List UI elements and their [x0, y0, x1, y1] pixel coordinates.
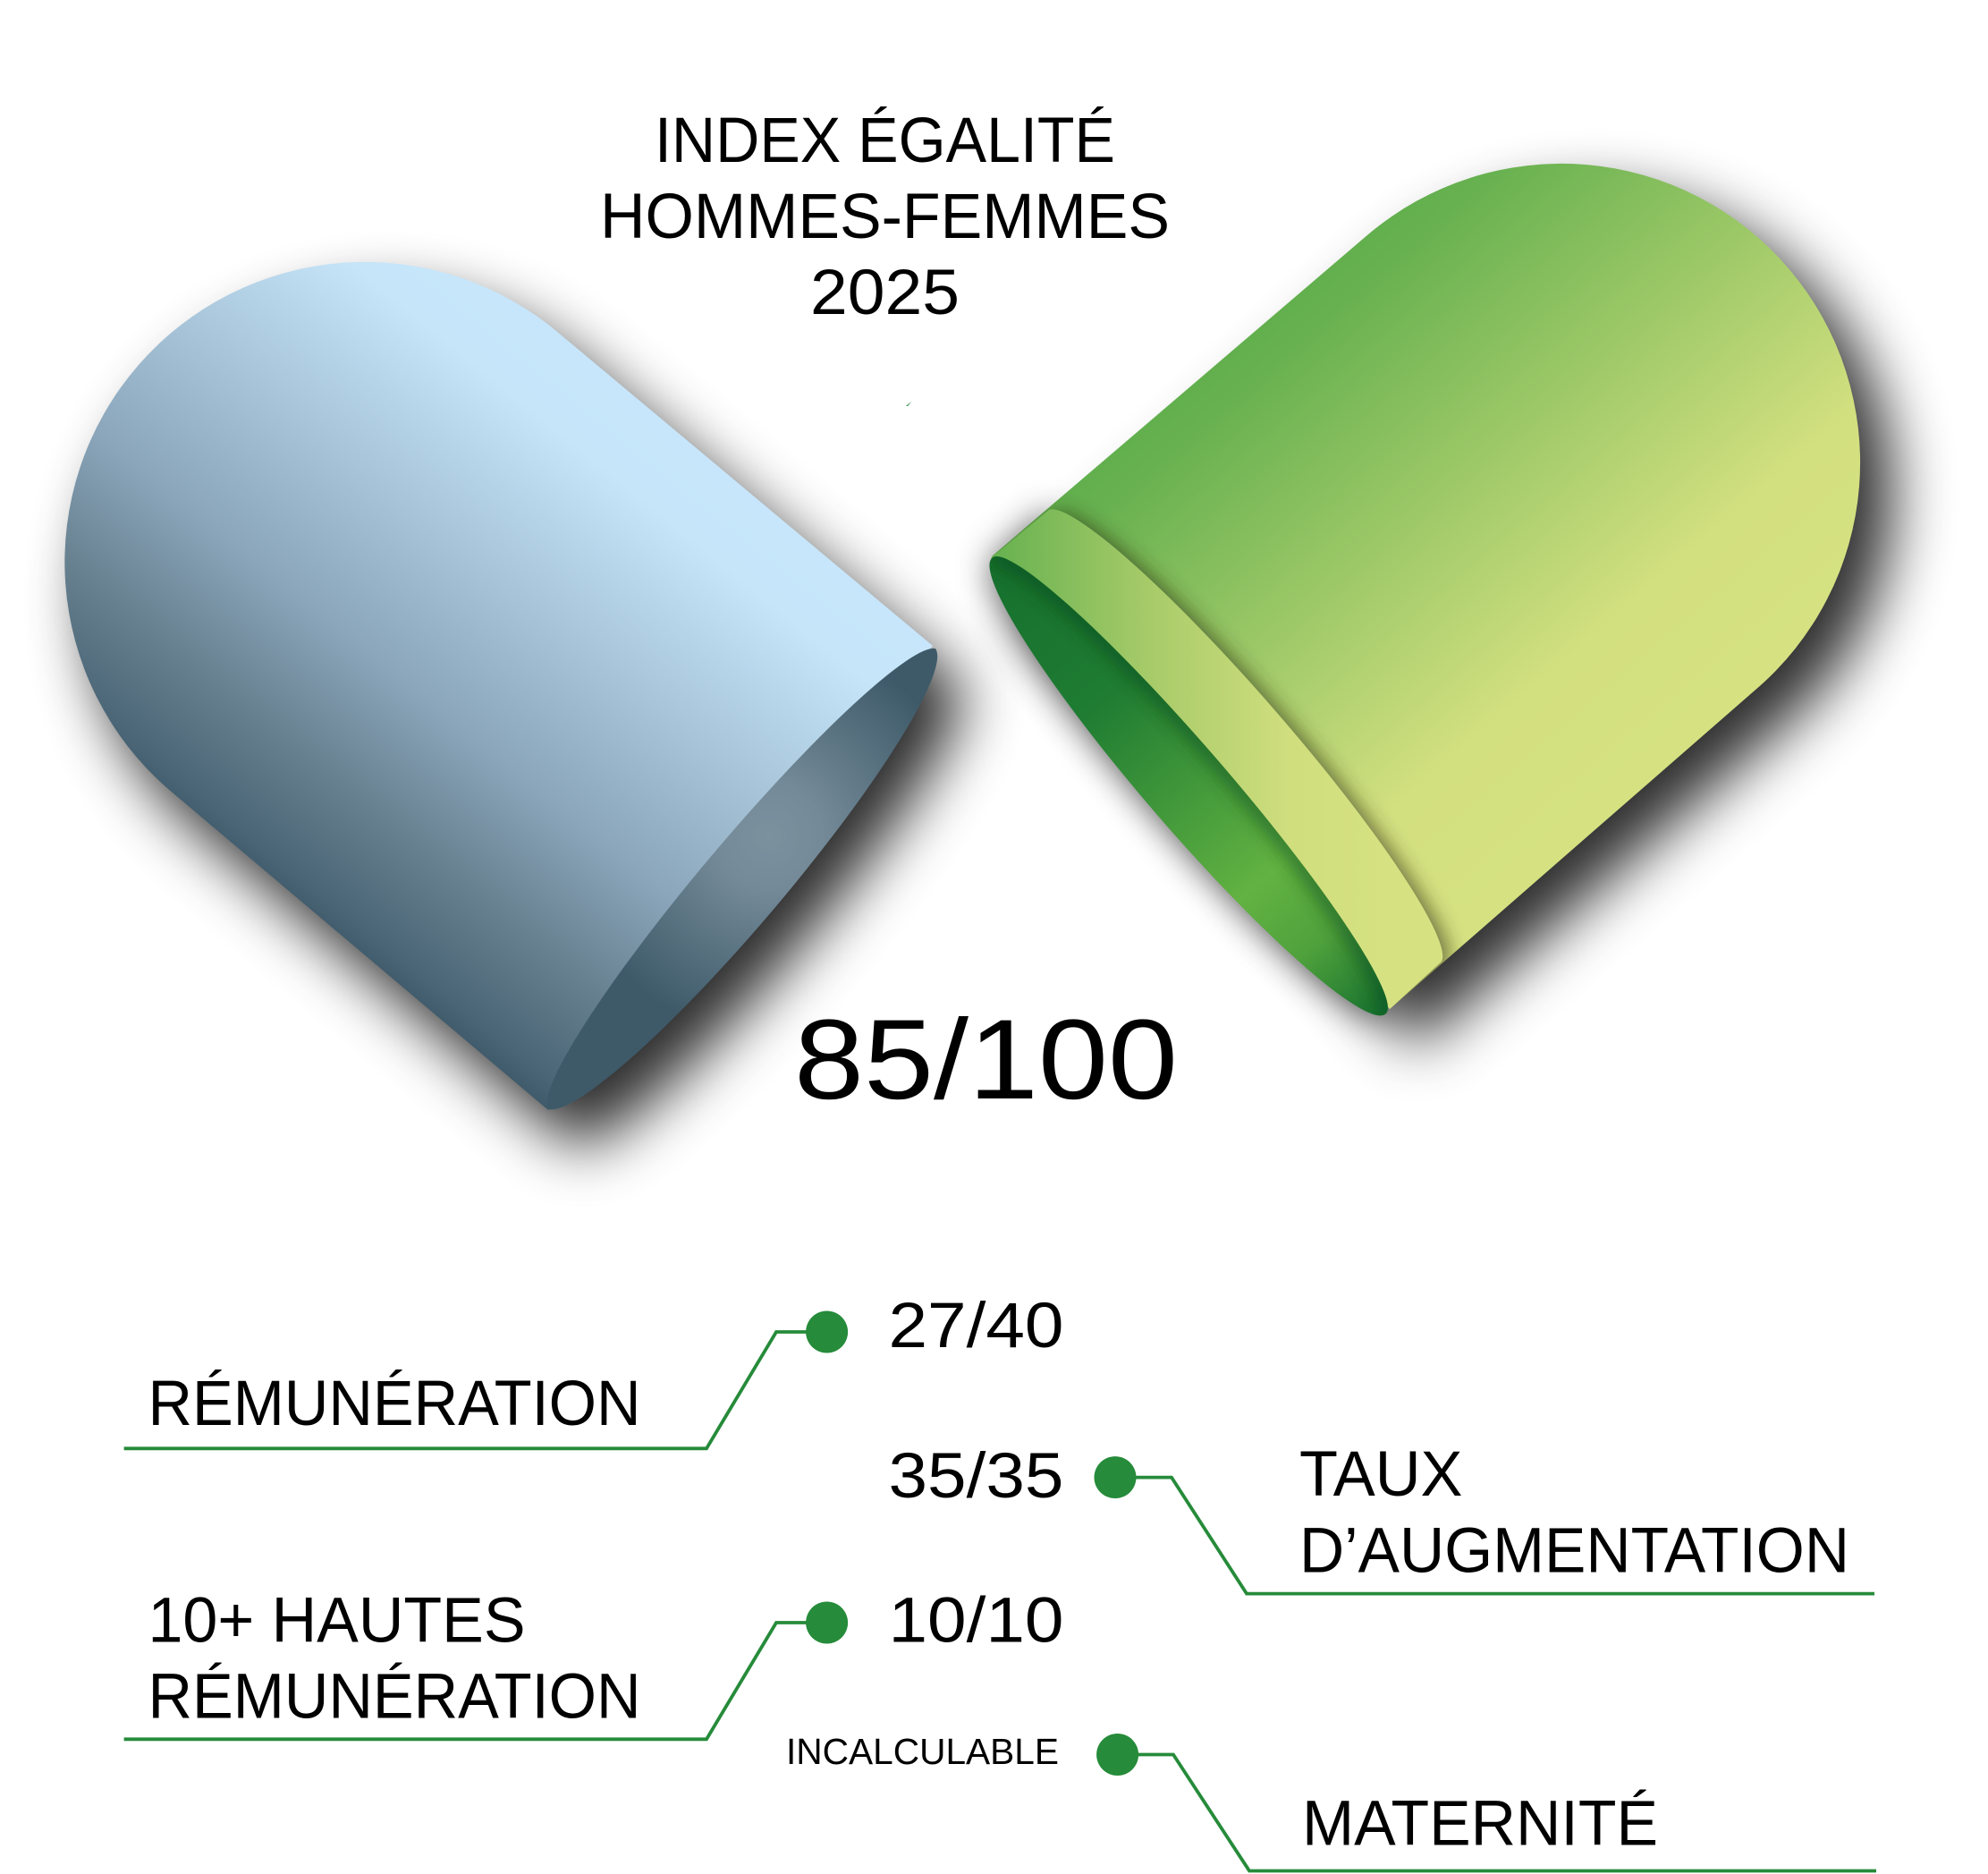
value: 10/10: [889, 1585, 1064, 1656]
value: 35/35: [889, 1441, 1064, 1512]
label: TAUX: [1299, 1439, 1463, 1510]
label: 10+ HAUTES: [148, 1585, 526, 1656]
capsule: blue half: [64, 262, 963, 1147]
dot: [1096, 1734, 1138, 1776]
capsule: green half: [989, 164, 1892, 1047]
connector: [124, 1623, 827, 1739]
total score: 85/100: [794, 996, 1178, 1123]
title: [600, 106, 1170, 328]
callout: 10+ hautes rémunération: [124, 1585, 1064, 1739]
opening inner shadow: [992, 556, 1388, 1013]
label: [148, 1585, 640, 1733]
label: D’AUGMENTATION: [1299, 1515, 1849, 1587]
green capsule drop shadow: [1024, 196, 1892, 1047]
dot: [806, 1311, 848, 1353]
green capsule body: [992, 164, 1860, 1009]
label: [1299, 1439, 1849, 1587]
label: RÉMUNÉRATION: [148, 1662, 640, 1733]
dot: [1095, 1456, 1136, 1498]
connector: [1115, 1478, 1874, 1594]
dot: [806, 1601, 848, 1644]
value: INCALCULABLE: [786, 1731, 1059, 1772]
title: 2025: [810, 258, 960, 328]
blue capsule drop shadow: [89, 298, 963, 1147]
green capsule opening: [989, 556, 1388, 1015]
value: 27/40: [889, 1291, 1064, 1361]
band shadow on body: [999, 511, 1450, 1011]
connector: [1118, 1755, 1876, 1871]
callout: taux d'augmentation: [889, 1439, 1874, 1594]
green capsule band: [991, 509, 1442, 1009]
label: MATERNITÉ: [1302, 1789, 1658, 1860]
blue capsule body: [64, 262, 933, 1110]
callout: maternité: [786, 1731, 1876, 1871]
title: HOMMES-FEMMES: [600, 182, 1170, 252]
green opening halo shadow: [990, 510, 1390, 1016]
label: RÉMUNÉRATION: [148, 1369, 640, 1439]
blue capsule opening: [546, 649, 937, 1109]
callout: rémunération: [124, 1291, 1064, 1448]
stray mark: [906, 402, 911, 406]
connector: [124, 1332, 827, 1448]
title: INDEX ÉGALITÉ: [655, 106, 1115, 176]
